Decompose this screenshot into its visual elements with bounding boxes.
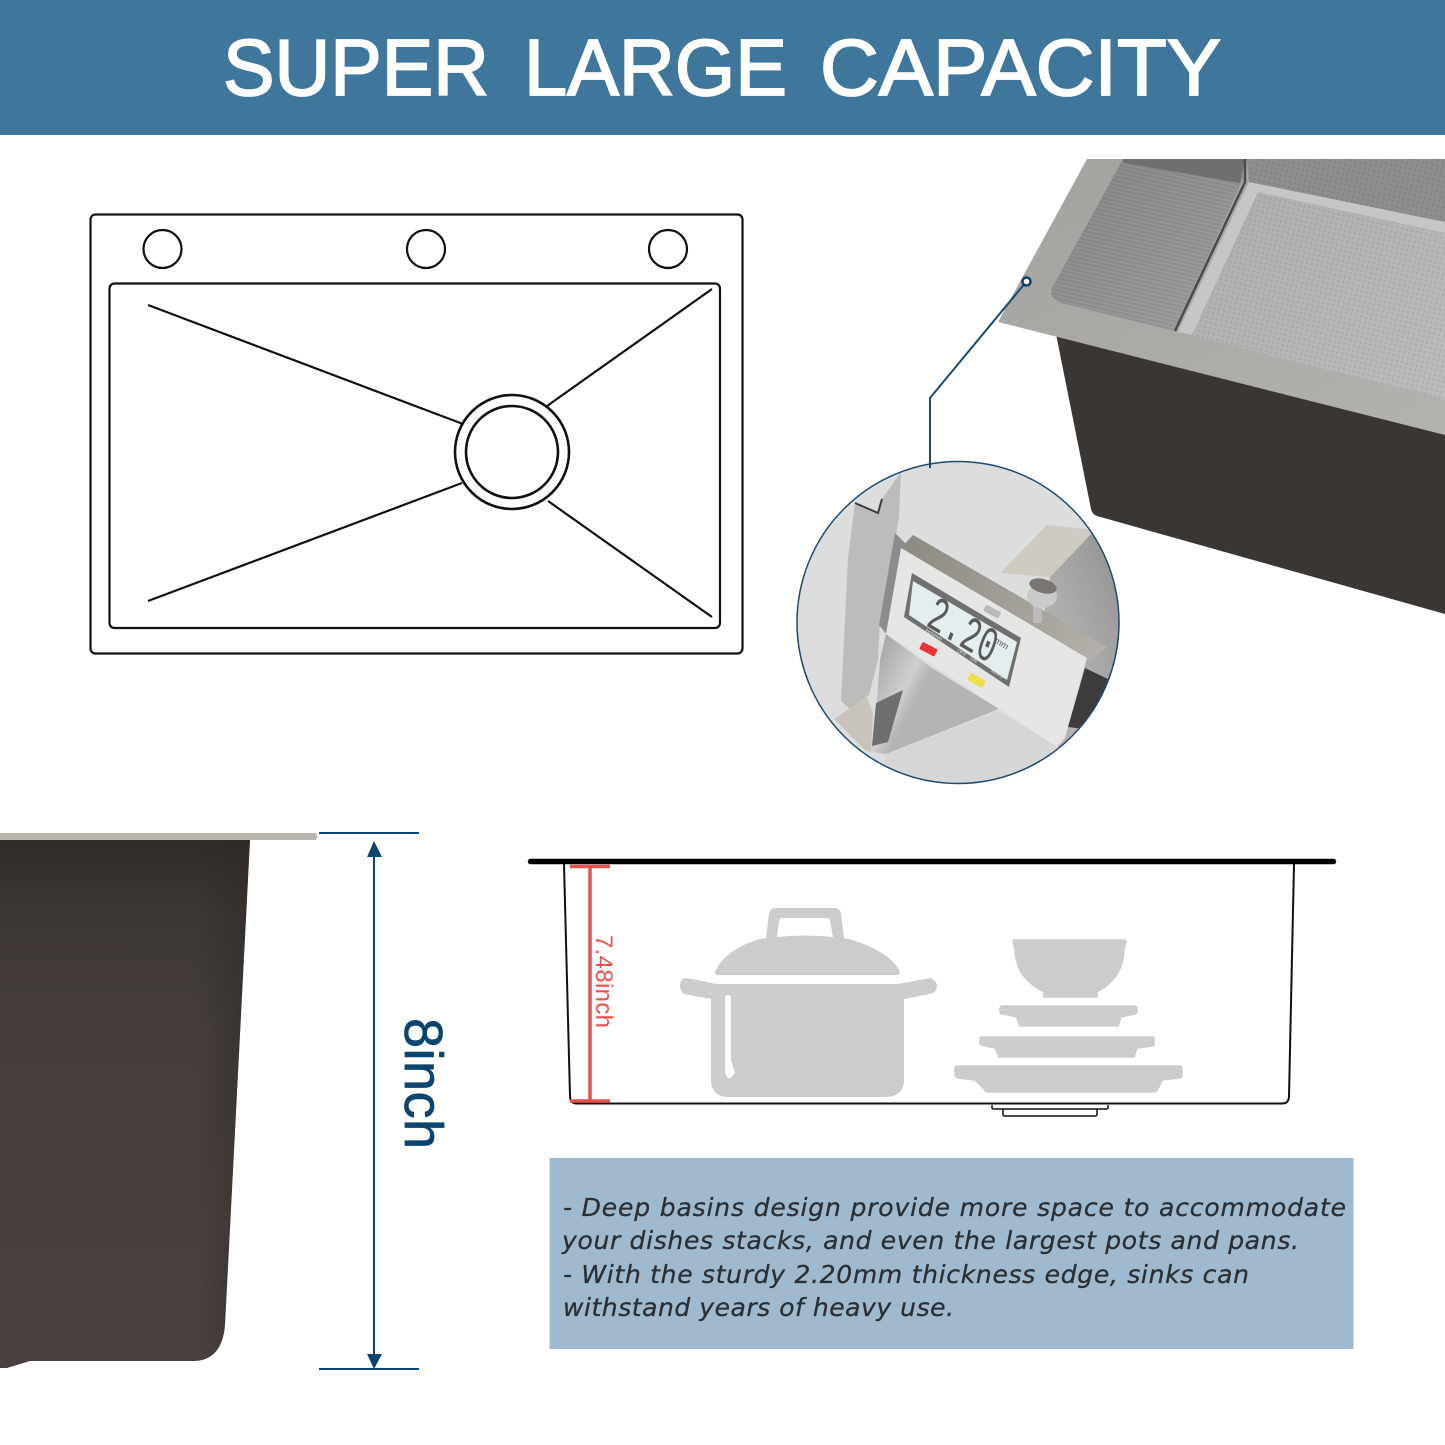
depth label: 8inch	[393, 1018, 453, 1149]
faucet holes	[144, 230, 687, 268]
caliper lower jaw	[871, 634, 932, 754]
basin corner shadow	[1175, 159, 1245, 331]
leader line	[930, 278, 1030, 468]
extension lines	[319, 833, 419, 1369]
left wall texture	[1051, 159, 1244, 331]
title: CAPACITY	[820, 23, 1221, 112]
small gray button	[983, 605, 1001, 619]
LCD reading: 2.20	[920, 587, 1005, 678]
sink rim	[998, 159, 1445, 435]
description text: - Deep basins design provide more space to accommodate	[563, 1193, 1346, 1222]
plate medium	[980, 1037, 1154, 1057]
caliper top edge	[901, 535, 1107, 662]
pot lid with handle	[715, 908, 900, 975]
drain	[455, 395, 569, 509]
LCD screen	[909, 581, 1017, 680]
depth label 7.48inch: 7.48inch	[590, 935, 617, 1028]
caliper detail circle	[797, 462, 1125, 790]
pot body	[680, 978, 937, 1097]
left wall shadow band	[1123, 159, 1245, 183]
description text: - With the sturdy 2.20mm thickness edge, sinks can	[563, 1260, 1249, 1289]
sink outer outline	[90, 214, 742, 654]
title: SUPER	[223, 23, 489, 112]
basin floor	[1178, 183, 1445, 399]
LCD frame labels: ZERO	[990, 668, 1005, 680]
beige background band	[1000, 525, 1095, 577]
sink corner photo	[998, 159, 1445, 614]
right dark slot	[1068, 668, 1110, 730]
icon: pot	[680, 908, 937, 1097]
LCD frame labels	[924, 628, 1005, 680]
LCD unit: mm	[993, 635, 1011, 652]
light surface under caliper	[1054, 745, 1058, 750]
lower jaw reflection	[872, 690, 903, 746]
slope lines	[148, 289, 712, 617]
circle outline	[797, 462, 1119, 784]
side edge shading	[193, 840, 250, 1361]
sink side body	[0, 840, 250, 1368]
LCD frame labels: ON	[969, 656, 979, 665]
side-view sink photo	[0, 833, 317, 1368]
top-view sink line drawing	[90, 214, 742, 654]
floor texture	[1192, 195, 1445, 398]
yellow button	[967, 673, 986, 688]
description panel	[550, 1158, 1354, 1349]
cross-section sink diagram	[530, 862, 1334, 1116]
jaw connector	[879, 533, 907, 636]
floor highlight strips	[1178, 182, 1445, 335]
side rim	[0, 833, 317, 840]
icon: bowl and plates	[955, 940, 1182, 1092]
back wall	[1247, 159, 1445, 227]
title	[223, 23, 1221, 112]
bowl	[1013, 940, 1126, 997]
caliper face	[886, 548, 1087, 747]
gray surface under caliper	[886, 668, 999, 754]
double arrow	[367, 841, 382, 1369]
caliper upper jaw	[841, 472, 901, 709]
jaw notch	[855, 499, 882, 513]
LCD frame labels: inch/mm	[924, 628, 943, 643]
pot highlight	[725, 995, 735, 1079]
red depth marker	[570, 866, 610, 1101]
plate small	[1000, 1006, 1137, 1026]
description text	[561, 1193, 1346, 1322]
drain stub	[992, 1105, 1108, 1116]
depth dimension 8inch	[319, 833, 453, 1369]
sink dark outer body	[1056, 334, 1445, 614]
description text: withstand years of heavy use.	[563, 1293, 954, 1322]
LCD frame labels: OFF	[956, 648, 967, 658]
plate large	[955, 1066, 1182, 1092]
back wall texture	[1248, 159, 1445, 219]
LCD frame	[904, 573, 1021, 687]
left basin wall	[1051, 159, 1244, 331]
description text: your dishes stacks, and even the largest pots and pans.	[561, 1226, 1299, 1255]
basin outline	[110, 284, 720, 628]
header banner	[0, 0, 1445, 135]
beige base	[834, 697, 873, 752]
title: LARGE	[524, 23, 787, 112]
basin outline	[564, 864, 1294, 1104]
thumb knob	[1027, 576, 1058, 623]
red button	[919, 642, 938, 657]
top flange	[530, 859, 1334, 864]
gray background	[1044, 534, 1118, 747]
